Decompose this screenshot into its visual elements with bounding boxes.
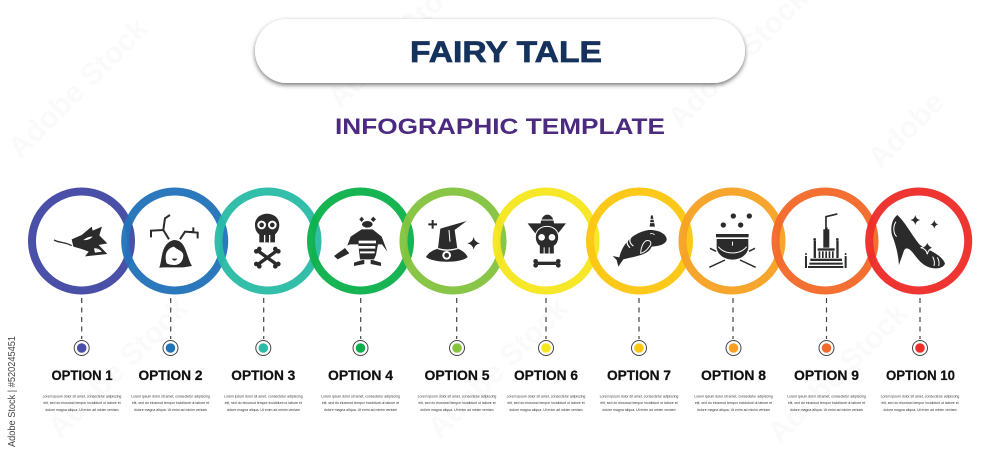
option 10: Lorem ipsum dolor sit amet, consectetur adipiscing: [881, 394, 959, 398]
option 8: [694, 340, 773, 412]
rings: [32, 192, 968, 290]
option 6: [507, 340, 585, 412]
watermark: Adobe Stock: [422, 292, 575, 445]
option 9: [787, 340, 866, 412]
option 1: elit, sed do eiusmod tempor incididunt ut labore et: [43, 401, 121, 405]
option 10: [881, 340, 959, 412]
option 4: dolore magna aliqua. Ut enim ad minim veniam: [324, 408, 397, 412]
option 6: dolore magna aliqua. Ut enim ad minim veniam: [509, 408, 583, 412]
option 1: Lorem ipsum dolor sit amet, consectetur adipiscing: [43, 394, 121, 398]
option 6: OPTION 6: [514, 368, 578, 383]
option 8: elit, sed do eiusmod tempor incididunt ut labore et: [695, 401, 772, 405]
watermark: Adobe: [862, 86, 951, 175]
option 10: elit, sed do eiusmod tempor incididunt ut labore et: [881, 401, 959, 405]
option 4: Lorem ipsum dolor sit amet, consectetur adipiscing: [321, 394, 400, 398]
title: FAIRY TALE: [410, 36, 602, 69]
option 8: dolore magna aliqua. Ut enim ad minim veniam: [697, 408, 770, 412]
option 5: OPTION 5: [424, 368, 490, 383]
icon: woman with antlers: [151, 215, 198, 268]
option 10: dolore magna aliqua. Ut enim ad minim veniam: [883, 408, 957, 412]
option 7: elit, sed do eiusmod tempor incididunt ut labore et: [600, 401, 678, 405]
icon: leaf creature: [54, 227, 107, 256]
title pill: [255, 19, 745, 83]
option 5: [418, 340, 496, 412]
watermark: Adobe Stock: [762, 297, 915, 450]
icon: castle fountain: [805, 214, 847, 268]
icon: glass slipper: [891, 215, 945, 268]
icon: skull and crossbones: [254, 214, 281, 269]
option 1: OPTION 1: [52, 368, 113, 383]
option 2: OPTION 2: [138, 368, 202, 383]
option 3: dolore magna aliqua. Ut enim ad minim veniam: [227, 408, 300, 412]
option 7: dolore magna aliqua. Ut enim ad minim veniam: [602, 408, 676, 412]
option 4: elit, sed do eiusmod tempor incididunt ut labore et: [322, 401, 399, 405]
option 2: [131, 340, 210, 412]
subtitle: INFOGRAPHIC TEMPLATE: [335, 114, 665, 139]
option 7: Lorem ipsum dolor sit amet, consectetur adipiscing: [600, 394, 678, 398]
watermark: Adobe Stock: [42, 292, 195, 445]
option 3: Lorem ipsum dolor sit amet, consectetur adipiscing: [224, 394, 303, 398]
icon: cauldron: [709, 213, 756, 267]
option 5: dolore magna aliqua. Ut enim ad minim veniam: [420, 408, 494, 412]
stock credit: Adobe Stock | #520245451: [6, 336, 18, 447]
option 4: [321, 340, 400, 412]
dashed connectors: [82, 298, 920, 339]
option 7: [600, 340, 678, 412]
option 5: Lorem ipsum dolor sit amet, consectetur adipiscing: [418, 394, 496, 398]
option 3: elit, sed do eiusmod tempor incididunt ut labore et: [225, 401, 302, 405]
option 5: elit, sed do eiusmod tempor incididunt ut labore et: [418, 401, 496, 405]
icon: armoured figure: [334, 217, 387, 266]
option 8: Lorem ipsum dolor sit amet, consectetur adipiscing: [694, 394, 773, 398]
option 10: OPTION 10: [886, 368, 955, 383]
option 9: Lorem ipsum dolor sit amet, consectetur adipiscing: [787, 394, 866, 398]
option 4: OPTION 4: [328, 368, 394, 383]
option 3: [224, 340, 303, 412]
option 6: Lorem ipsum dolor sit amet, consectetur adipiscing: [507, 394, 585, 398]
option 6: elit, sed do eiusmod tempor incididunt ut labore et: [507, 401, 585, 405]
icon: witch hat: [426, 220, 480, 262]
option 2: elit, sed do eiusmod tempor incididunt ut labore et: [132, 401, 209, 405]
option 8: OPTION 8: [701, 368, 767, 383]
watermark: Adobe Stock: [2, 12, 155, 165]
option 7: OPTION 7: [607, 368, 671, 383]
option 1: [43, 340, 121, 412]
option 3: OPTION 3: [231, 368, 296, 383]
option 2: Lorem ipsum dolor sit amet, consectetur adipiscing: [131, 394, 210, 398]
option 9: elit, sed do eiusmod tempor incididunt ut labore et: [788, 401, 865, 405]
option 9: dolore magna aliqua. Ut enim ad minim veniam: [790, 408, 863, 412]
option 9: OPTION 9: [794, 368, 859, 383]
icon: skull with hat: [528, 215, 566, 268]
option 2: dolore magna aliqua. Ut enim ad minim veniam: [134, 408, 207, 412]
icon: narwhal: [613, 215, 667, 267]
option 1: dolore magna aliqua. Ut enim ad minim veniam: [45, 408, 119, 412]
